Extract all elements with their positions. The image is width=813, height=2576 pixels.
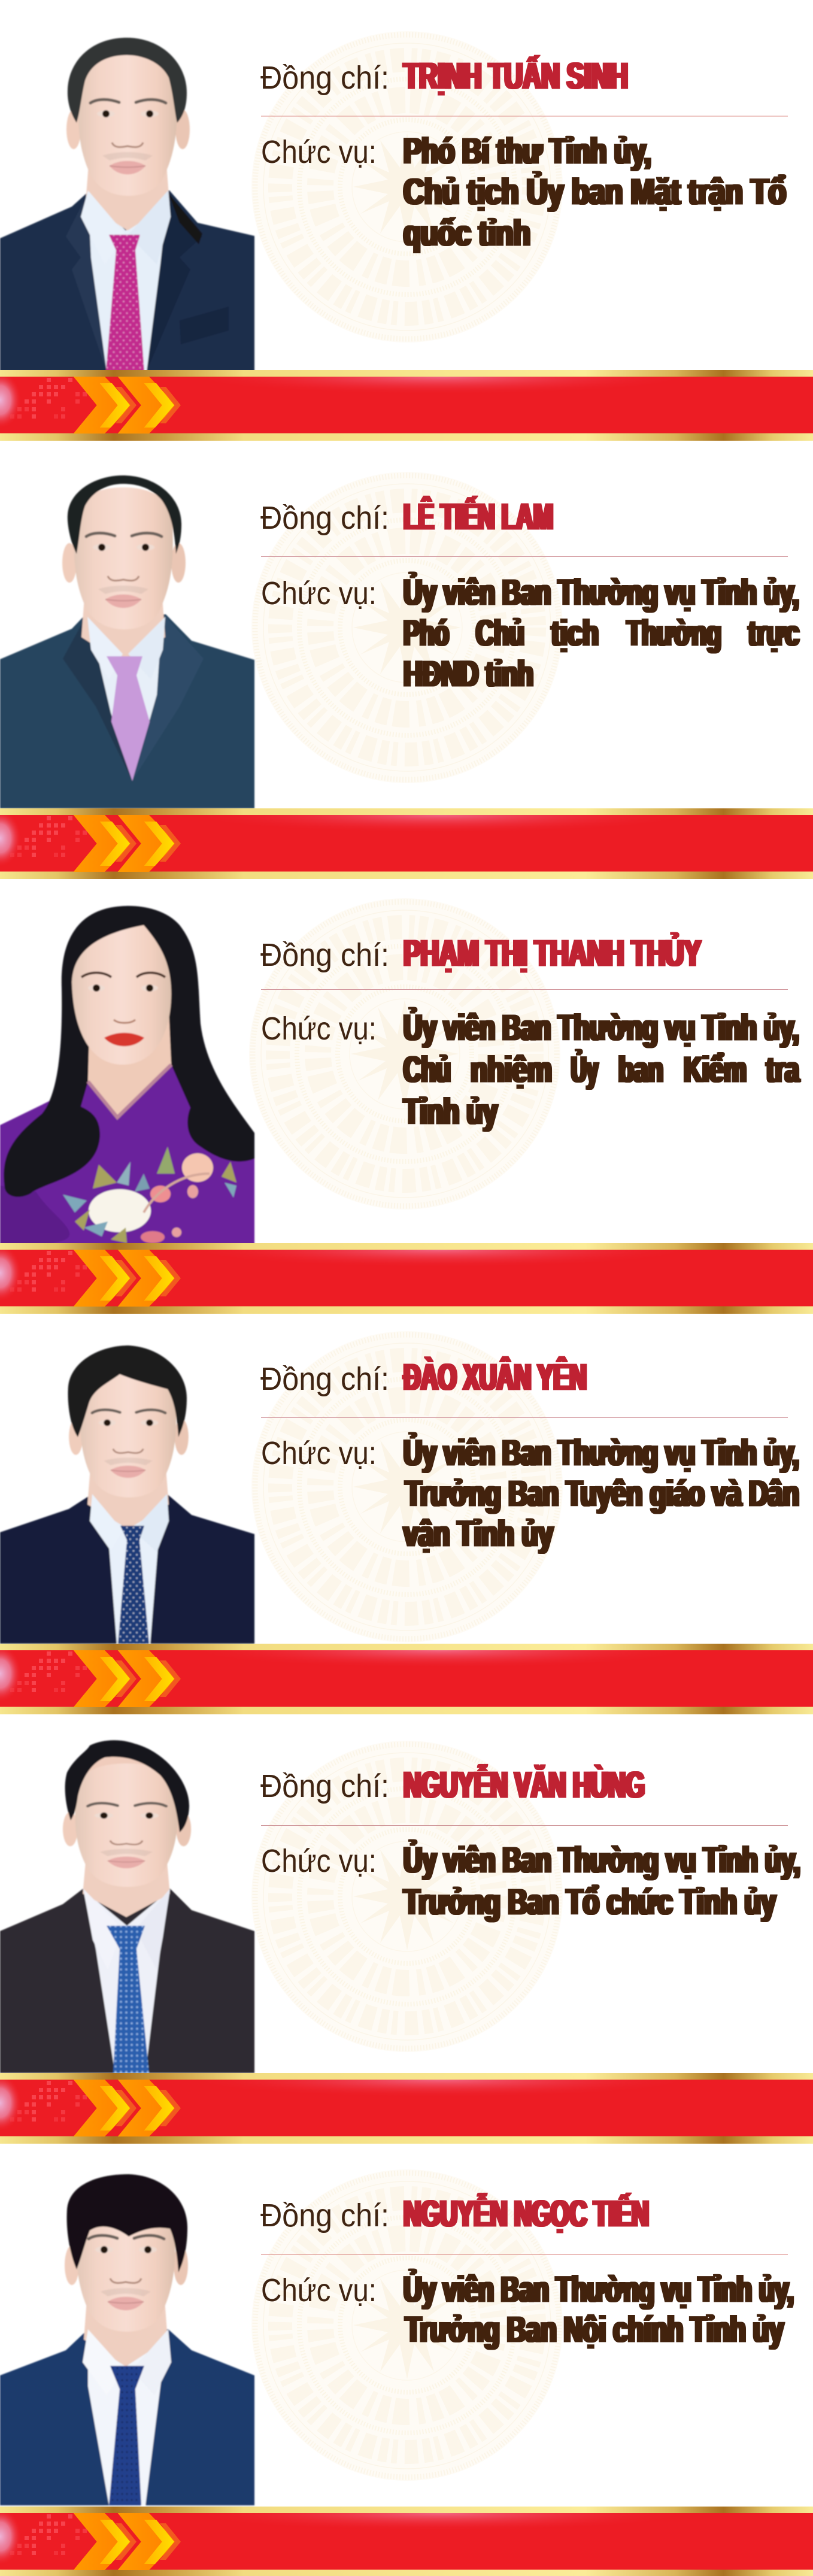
floral embroidery bbox=[63, 1147, 236, 1243]
label: Đồng chí: Đồng chí: bbox=[260, 2198, 389, 2233]
ribbon banner bbox=[0, 2062, 813, 2144]
position text: HĐND tỉnh bbox=[404, 653, 533, 694]
divider bbox=[261, 556, 788, 557]
label: Đồng chí: Đồng chí: bbox=[260, 60, 389, 96]
name: ĐÀO XUÂN YÊN bbox=[404, 1357, 587, 1398]
position text bbox=[404, 1007, 800, 1132]
panel: Nguyễn Ngọc Tiến bbox=[0, 2169, 813, 2576]
name: NGUYỄN NGỌC TIẾN bbox=[404, 2193, 649, 2235]
emblem: bronze drum watermark bbox=[251, 1741, 563, 2052]
ribbon banner bbox=[0, 359, 813, 441]
emblem: bronze drum watermark bbox=[249, 898, 560, 1210]
label: Chức vụ: Chức vụ: bbox=[261, 575, 377, 611]
ribbon banner bbox=[0, 1232, 813, 1314]
position text: quốc tỉnh bbox=[404, 213, 530, 253]
panel: Đào Xuân Yên bbox=[0, 1331, 813, 1714]
position text: nhiệm bbox=[471, 1049, 552, 1090]
position text: Tỉnh ủy bbox=[404, 1091, 497, 1132]
divider bbox=[261, 1825, 788, 1826]
position text bbox=[404, 131, 786, 253]
position text: Chủ bbox=[404, 1049, 451, 1090]
ribbon banner bbox=[0, 2495, 813, 2576]
panel: Lê Tiến Lam bbox=[0, 472, 813, 879]
position text: Phó Bí thư Tỉnh ủy, bbox=[404, 131, 651, 171]
photo: Nguyễn Ngọc Tiến bbox=[0, 2174, 254, 2505]
panel: Phạm Thị Thanh Thủy bbox=[0, 898, 813, 1314]
divider bbox=[261, 116, 788, 117]
emblem: bronze drum watermark bbox=[251, 2169, 563, 2481]
ribbon banner bbox=[0, 797, 813, 879]
position text: Chủ bbox=[476, 613, 524, 653]
position text bbox=[404, 1432, 799, 1554]
position text bbox=[404, 2269, 794, 2350]
emblem: bronze drum watermark bbox=[251, 1331, 563, 1642]
divider bbox=[261, 2254, 788, 2255]
position text: Ủy bbox=[571, 1049, 598, 1090]
name: NGUYỄN VĂN HÙNG bbox=[404, 1765, 645, 1806]
position text: tra bbox=[766, 1049, 800, 1090]
label: Đồng chí: Đồng chí: bbox=[260, 500, 389, 536]
divider bbox=[261, 1417, 788, 1418]
position text: ban bbox=[618, 1049, 663, 1090]
panel: Trịnh Tuấn Sinh bbox=[0, 31, 813, 441]
label: Đồng chí: Đồng chí: bbox=[260, 937, 389, 973]
label: Đồng chí: Đồng chí: bbox=[260, 1768, 389, 1804]
position text: Phó bbox=[404, 613, 449, 653]
position text bbox=[404, 1839, 800, 1922]
photo: Trịnh Tuấn Sinh bbox=[0, 38, 254, 371]
photo: Nguyễn Văn Hùng bbox=[0, 1740, 254, 2073]
emblem: bronze drum watermark bbox=[251, 31, 563, 343]
photo: Phạm Thị Thanh Thủy bbox=[0, 906, 254, 1244]
photo: Đào Xuân Yên bbox=[0, 1345, 254, 1644]
name: TRỊNH TUẤN SINH bbox=[404, 56, 628, 97]
photo: Lê Tiến Lam bbox=[0, 475, 254, 808]
panel: Nguyễn Văn Hùng bbox=[0, 1740, 813, 2144]
ribbon banner bbox=[0, 1632, 813, 1714]
position text: tịch bbox=[551, 613, 599, 653]
position text bbox=[404, 572, 799, 694]
position text: vận Tỉnh ủy bbox=[404, 1513, 553, 1554]
label: Chức vụ: Chức vụ: bbox=[261, 134, 377, 170]
label: Chức vụ: Chức vụ: bbox=[261, 2272, 377, 2308]
label: Chức vụ: Chức vụ: bbox=[261, 1435, 377, 1471]
divider bbox=[261, 989, 788, 990]
position text: Thường bbox=[627, 613, 721, 653]
label: Chức vụ: Chức vụ: bbox=[261, 1011, 377, 1047]
position text: Kiểm bbox=[684, 1049, 747, 1090]
label: Chức vụ: Chức vụ: bbox=[261, 1843, 377, 1879]
label: Đồng chí: Đồng chí: bbox=[260, 1361, 389, 1397]
name: LÊ TIẾN LAM bbox=[404, 496, 553, 538]
emblem: bronze drum watermark bbox=[251, 472, 563, 783]
